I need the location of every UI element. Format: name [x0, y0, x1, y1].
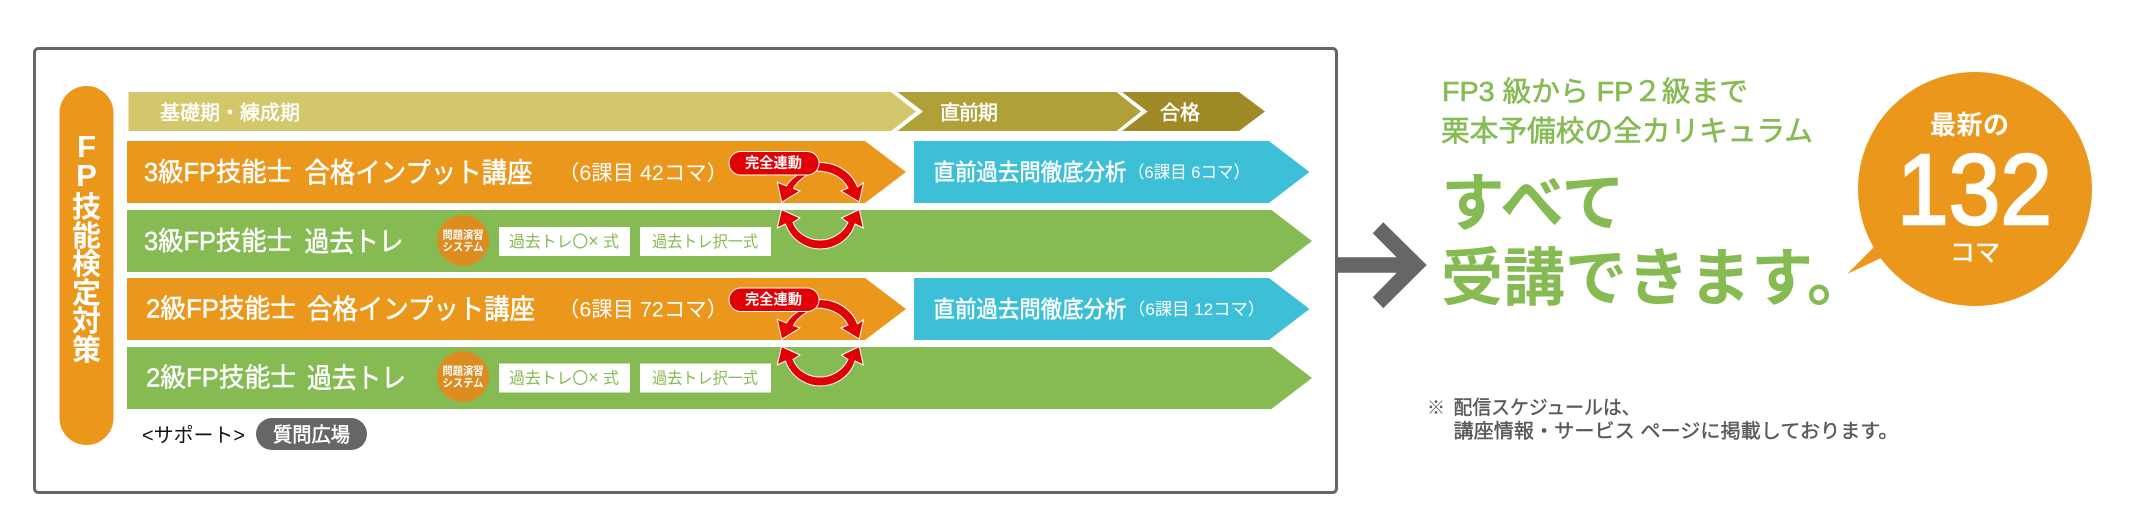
vertical label: FP exam [60, 86, 114, 445]
heading: full curriculum: FP3 級から FP２級まで [1442, 76, 1748, 107]
row: grade 2 input course [127, 278, 906, 340]
row: grade 2 input course: （6課目 72コマ） [558, 298, 728, 322]
vertical label: FP exam: 策 [72, 334, 101, 367]
badge: question system: 問題演習 [442, 228, 484, 242]
row: grade 3 final analysis: （6課目 6コマ） [1128, 163, 1250, 182]
headline: can take all: すべて [1441, 169, 1625, 239]
vertical label: FP exam: P [76, 158, 97, 193]
pill: fully linked: 完全連動 [745, 290, 802, 308]
box: multiple choice: 過去トレ択一式 [652, 370, 758, 388]
speech bubble: 132 lessons [1847, 72, 2092, 306]
arrows: grade 3 lower [777, 210, 863, 249]
box: true false [499, 227, 630, 256]
row: grade 2 past exercises [127, 347, 1312, 409]
row: grade 2 final analysis: （6課目 12コマ） [1128, 300, 1265, 319]
row: grade 2 final analysis: 直前過去問徹底分析 [934, 296, 1126, 322]
row: grade 3 final analysis [914, 141, 1310, 203]
badge: question system [437, 215, 489, 266]
row: grade 2 past exercises: 過去トレ [307, 362, 406, 394]
phase arrow: foundation [128, 92, 916, 131]
box: true false [499, 364, 630, 392]
headline: can take all [1441, 169, 1869, 314]
speech bubble: 132 lessons: 最新の [1930, 110, 2009, 140]
row: grade 3 input course [127, 141, 906, 203]
row: grade 3 input course: 合格インプット講座 [304, 157, 532, 188]
row: grade 2 input course: 合格インプット講座 [307, 294, 535, 324]
row: grade 3 past exercises: 3級FP技能士 [144, 226, 292, 256]
heading: full curriculum [1441, 76, 1813, 148]
phase arrow: pass: 合格 [1160, 102, 1200, 124]
vertical label: FP exam: 能 [72, 220, 101, 253]
speech bubble: 132 lessons: 132 [1897, 134, 2052, 246]
row: grade 3 input course: （6課目 42コマ） [558, 162, 728, 185]
box: true false: 過去トレ〇× 式 [509, 368, 619, 388]
note: schedule: 配信スケジュールは、 [1454, 397, 1640, 419]
badge: question system [437, 351, 489, 402]
badge: question system: 問題演習 [442, 364, 484, 378]
headline: can take all: 受講できます。 [1441, 244, 1869, 314]
heading: full curriculum: 栗本予備校の全カリキュラム [1441, 115, 1813, 148]
phase arrow: pass [1122, 92, 1265, 131]
arrow: to result [1337, 222, 1427, 308]
vertical label: FP exam: 定 [72, 277, 101, 310]
vertical label: FP exam: 技 [72, 191, 101, 224]
pill: question forum: 質問広場 [273, 424, 350, 446]
row: grade 3 input course: 3級FP技能士 [144, 157, 292, 187]
phase arrow: final stretch: 直前期 [940, 102, 998, 124]
panel: curriculum frame [34, 48, 1336, 492]
row: grade 3 past exercises [127, 210, 1312, 272]
linkage: grade 3 [729, 152, 864, 249]
arrows: grade 2 lower [777, 346, 863, 386]
pill: question forum [256, 418, 367, 450]
phase arrow: foundation: 基礎期・練成期 [160, 102, 300, 124]
linkage: grade 2 [729, 288, 864, 386]
row: grade 2 past exercises: 2級FP技能士 [146, 362, 296, 392]
phase arrow: final stretch [898, 92, 1141, 131]
row: grade 2 final analysis [914, 278, 1310, 340]
badge: question system: システム [442, 376, 484, 390]
speech bubble: 132 lessons: コマ [1950, 239, 2000, 267]
box: true false: 過去トレ〇× 式 [509, 231, 619, 251]
pill: fully linked: 完全連動 [745, 154, 802, 172]
row: grade 3 final analysis: 直前過去問徹底分析 [934, 159, 1126, 185]
box: multiple choice [640, 364, 771, 392]
box: multiple choice: 過去トレ択一式 [652, 233, 758, 251]
vertical label: FP exam: 検 [72, 248, 101, 281]
support label: <サポート> [142, 424, 245, 447]
note: schedule: ※ [1427, 398, 1445, 418]
note: schedule [1427, 397, 1898, 442]
note: schedule: 講座情報・サービス ページに掲載しております。 [1454, 420, 1898, 442]
vertical label: FP exam: 対 [72, 305, 101, 338]
box: multiple choice [640, 227, 771, 256]
row: grade 3 past exercises: 過去トレ [304, 226, 404, 257]
badge: question system: システム [442, 240, 484, 254]
vertical label: FP exam: F [77, 129, 96, 164]
row: grade 2 input course: 2級FP技能士 [146, 294, 296, 324]
arrows: grade 2 upper [777, 299, 864, 339]
arrows: grade 3 upper [777, 162, 864, 202]
